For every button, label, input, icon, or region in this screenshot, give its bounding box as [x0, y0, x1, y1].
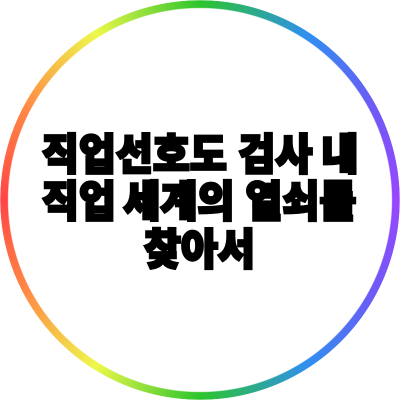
title: 직업 세계의 열쇠를	[42, 178, 356, 226]
title: 직업선호도 검사 내	[42, 131, 358, 179]
title: 찾아서	[144, 226, 255, 274]
